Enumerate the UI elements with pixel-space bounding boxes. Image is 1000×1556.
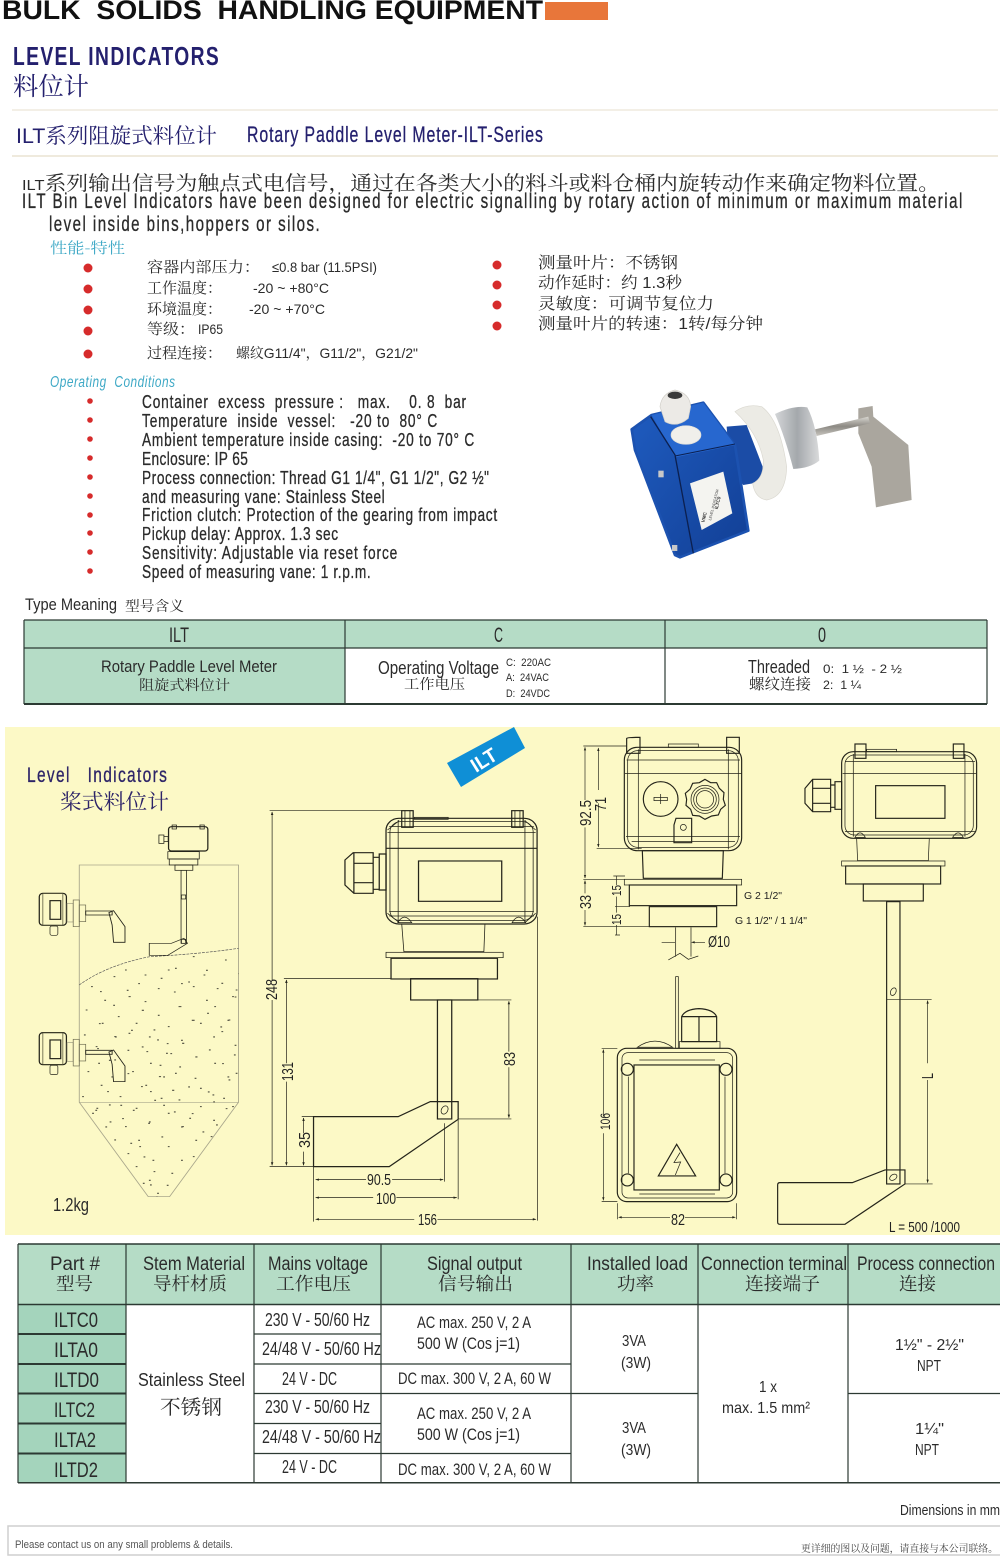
weight label: 1.2kg xyxy=(53,1195,89,1215)
type meaning table: 2: 1 ¼ xyxy=(823,678,862,692)
rear view dimensions: 82 xyxy=(671,1212,685,1229)
part numbers: ILTA0 xyxy=(54,1339,98,1362)
signal output values: AC max. 250 V, 2 A xyxy=(417,1313,532,1332)
type meaning table: D: 24VDC xyxy=(506,688,550,700)
main side view dimensions: 156 xyxy=(418,1212,437,1229)
series heading xyxy=(16,124,543,148)
type meaning table: 0: 1 ½ - 2 ½ xyxy=(823,662,902,676)
stem length label: L = 500 /1000 xyxy=(889,1219,960,1236)
type meaning heading: Type Meaning xyxy=(25,595,117,614)
installed load values: 3VA xyxy=(622,1420,646,1437)
intro text block xyxy=(22,172,962,236)
English panel heading: Level Indicators xyxy=(27,763,167,787)
features heading: 性能-特性 xyxy=(50,237,125,258)
footer box xyxy=(8,1526,1000,1555)
Chinese series heading: ILT系列阻旋式料位计 xyxy=(16,125,217,148)
part numbers: ILTD0 xyxy=(54,1369,99,1392)
front view dimensions: 15 xyxy=(609,885,624,896)
operating conditions list: Pickup delay: Approx. 1.3 sec xyxy=(142,524,338,545)
main side view dimensions: 248 xyxy=(264,979,281,1000)
product photo: VMC xyxy=(700,511,708,523)
features list right: 动作延时：约 1.3秒 xyxy=(538,274,683,292)
part numbers: ILTD2 xyxy=(54,1459,98,1482)
signal output values: 500 W (Cos j=1) xyxy=(417,1425,520,1444)
table header labels: Signal output xyxy=(427,1254,523,1275)
features list left: 环境温度： xyxy=(147,298,222,319)
type meaning table xyxy=(24,620,987,704)
process connection values: 1¼" xyxy=(915,1421,944,1438)
main side view dimensions: 35 xyxy=(297,1132,314,1148)
table header labels: Part # xyxy=(50,1254,100,1275)
stem length label xyxy=(889,1073,960,1236)
front view dimensions: 15 xyxy=(609,914,624,925)
table header labels xyxy=(50,1254,995,1296)
features list left: ≤0.8 bar (11.5PSI) xyxy=(272,259,377,275)
footer note Chinese: 更详细的图以及问题，请直接与本公司联络。 xyxy=(801,1542,998,1555)
features list right: 灵敏度：可调节复位力 xyxy=(538,291,714,314)
process connection values: NPT xyxy=(917,1358,941,1375)
table header labels: 型号 xyxy=(56,1270,93,1296)
type meaning table: Operating Voltage xyxy=(378,658,499,678)
mains voltage values: 24 V - DC xyxy=(282,1457,337,1477)
header bar xyxy=(2,0,608,25)
connection terminal value xyxy=(722,1379,811,1417)
type meaning table: Rotary Paddle Level Meter xyxy=(101,657,277,676)
stem material xyxy=(138,1370,245,1420)
operating conditions list: Sensitivity: Adjustable via reset force xyxy=(142,543,397,564)
long stem view drawing xyxy=(778,744,977,1224)
mains voltage values: 230 V - 50/60 Hz xyxy=(265,1310,370,1330)
operating conditions list: Friction clutch: Protection of the gearing from impact xyxy=(142,505,498,526)
type meaning table: C xyxy=(494,624,503,647)
specification table xyxy=(18,1244,1000,1483)
front view dimensions: G 1 1/2" / 1 1/4" xyxy=(735,915,807,927)
product photo xyxy=(632,390,912,557)
type meaning table: C: 220AC xyxy=(506,657,551,669)
table header labels: Mains voltage xyxy=(268,1254,368,1275)
type meaning table: ILT xyxy=(169,624,189,647)
connection terminal value: max. 1.5 mm² xyxy=(722,1400,811,1417)
main title xyxy=(13,41,219,103)
features list left: 容器内部压力： xyxy=(147,256,260,277)
ILT badge: ILT xyxy=(467,744,502,777)
main side view drawing xyxy=(270,811,537,1222)
table header labels: 信号输出 xyxy=(438,1270,513,1296)
mains voltage values: 230 V - 50/60 Hz xyxy=(265,1397,370,1417)
dimension lines xyxy=(270,811,537,1222)
process connection values: 1½" - 2½" xyxy=(895,1337,964,1354)
orange header block xyxy=(545,2,608,20)
signal output values: 500 W (Cos j=1) xyxy=(417,1334,520,1353)
features list right: 测量叶片：不锈钢 xyxy=(538,250,678,273)
main side view dimensions: 90.5 xyxy=(367,1172,391,1189)
front view dimensions: G 2 1/2" xyxy=(744,890,782,902)
main side view dimensions: 131 xyxy=(280,1062,297,1081)
table header labels: 功率 xyxy=(617,1270,654,1296)
features list right: 测量叶片的转速：1转/每分钟 xyxy=(538,315,763,333)
operating conditions list xyxy=(87,392,498,583)
front view dimensions: 33 xyxy=(578,895,595,909)
signal output values: DC max. 300 V, 2 A, 60 W xyxy=(398,1369,551,1388)
front view dimensions: Ø10 xyxy=(708,934,730,951)
English intro line 2: level inside bins,hoppers or silos. xyxy=(49,211,320,236)
footer note English: Please contact us on any small problems & details. xyxy=(15,1539,233,1551)
process connection values: NPT xyxy=(915,1442,939,1459)
table header labels: 连接 xyxy=(899,1270,937,1296)
rear view drawing xyxy=(602,977,737,1219)
type meaning table: Threaded xyxy=(748,657,810,677)
operating conditions heading: Operating Conditions xyxy=(50,372,175,390)
operating conditions list: Process connection: Thread G1 1/4", G1 1/2", G2 ½" xyxy=(142,468,489,489)
front view dimensions xyxy=(578,797,807,951)
features list left: -20 ~ +70°C xyxy=(249,301,325,317)
type meaning heading xyxy=(25,595,184,616)
main side view dimensions: 100 xyxy=(376,1191,396,1208)
operating conditions list: Temperature inside vessel: -20 to 80° C xyxy=(142,411,437,432)
signal output values: DC max. 300 V, 2 A, 60 W xyxy=(398,1460,551,1479)
features list right xyxy=(492,250,763,333)
product photo: ILTC0 xyxy=(714,496,722,510)
main side view dimensions xyxy=(264,979,519,1229)
lower side device xyxy=(39,1033,125,1082)
operating conditions list: Enclosure: IP 65 xyxy=(142,449,248,470)
stem length label: L xyxy=(920,1073,937,1079)
part numbers xyxy=(54,1309,99,1482)
installed load values: (3W) xyxy=(621,1355,651,1372)
front view drawing xyxy=(583,737,742,960)
table header labels: 工作电压 xyxy=(276,1270,351,1296)
part numbers: ILTC2 xyxy=(54,1399,95,1422)
type meaning heading: 型号含义 xyxy=(125,596,184,616)
front view dimensions: 71 xyxy=(593,797,610,811)
connection terminal value: 1 x xyxy=(759,1379,777,1396)
main side view dimensions: 83 xyxy=(502,1052,519,1066)
features list left: -20 ~ +80°C xyxy=(253,280,329,296)
table header labels: 导杆材质 xyxy=(153,1270,227,1296)
silo diagram xyxy=(39,825,251,1207)
operating conditions list: and measuring vane: Stainless Steel xyxy=(142,487,385,508)
installed load values: 3VA xyxy=(622,1333,646,1350)
type meaning table: A: 24VAC xyxy=(506,672,549,684)
part numbers: ILTA2 xyxy=(54,1429,96,1452)
English intro line 1: ILT Bin Level Indicators have been designed for electric signalling by rotary action of minimum or maximum material xyxy=(22,188,962,213)
part numbers: ILTC0 xyxy=(54,1309,98,1332)
type meaning table: 螺纹连接 xyxy=(749,673,811,694)
panel heading xyxy=(27,763,169,816)
rear view dimensions xyxy=(597,1113,685,1229)
features list left: 过程连接： xyxy=(147,342,222,363)
mains voltage values: 24/48 V - 50/60 Hz xyxy=(262,1427,381,1447)
stem material: 不锈钢 xyxy=(160,1391,222,1420)
installed load values: (3W) xyxy=(621,1442,651,1459)
operating conditions list: Ambient temperature inside casing: -20 to 70° C xyxy=(142,430,474,451)
table header and part column fill xyxy=(18,1244,1000,1304)
upper side device xyxy=(39,893,125,942)
features list left: 等级： xyxy=(147,318,195,339)
process connection values xyxy=(895,1337,964,1459)
table header labels: Stem Material xyxy=(143,1254,245,1275)
type meaning table: 0 xyxy=(818,624,826,647)
type meaning table: 阻旋式料位计 xyxy=(139,675,230,695)
rear view dimensions: 106 xyxy=(597,1113,613,1130)
features list left: IP65 xyxy=(198,321,223,337)
ILT badge xyxy=(447,727,525,787)
operating conditions list: Speed of measuring vane: 1 r.p.m. xyxy=(142,562,371,583)
type meaning table: 工作电压 xyxy=(404,674,465,694)
features list left: 螺纹G11/4"，G11/2"，G21/2" xyxy=(236,345,418,362)
English title: LEVEL INDICATORS xyxy=(13,41,219,71)
operating conditions list: Container excess pressure : max. 0. 8 bar xyxy=(142,392,467,413)
product photo: LEVEL INDICATOR xyxy=(708,488,720,521)
Chinese title: 料位计 xyxy=(13,67,89,103)
Chinese intro: ILT系列输出信号为触点式电信号，通过在各类大小的料斗或料仓桶内旋转动作来确定物料位置。 xyxy=(22,172,940,195)
mains voltage values: 24/48 V - 50/60 Hz xyxy=(262,1339,381,1359)
features list left: 工作温度： xyxy=(147,277,222,298)
mains voltage values xyxy=(262,1310,381,1477)
stem material: Stainless Steel xyxy=(138,1370,245,1390)
signal output values xyxy=(398,1313,551,1479)
features list left xyxy=(84,256,418,363)
yellow drawing panel xyxy=(5,727,1000,1235)
table header labels: Installed load xyxy=(587,1254,688,1275)
dimension lines xyxy=(583,746,705,942)
top mounted device xyxy=(149,825,208,955)
English series heading: Rotary Paddle Level Meter-ILT-Series xyxy=(247,124,543,148)
mains voltage values: 24 V - DC xyxy=(282,1369,337,1389)
table header labels: 连接端子 xyxy=(745,1270,820,1296)
front view dimensions: 92.5 xyxy=(578,800,595,826)
Chinese panel heading: 桨式料位计 xyxy=(60,786,169,816)
table header labels: Connection terminal xyxy=(701,1254,847,1275)
installed load values xyxy=(621,1333,651,1459)
signal output values: AC max. 250 V, 2 A xyxy=(417,1404,532,1423)
